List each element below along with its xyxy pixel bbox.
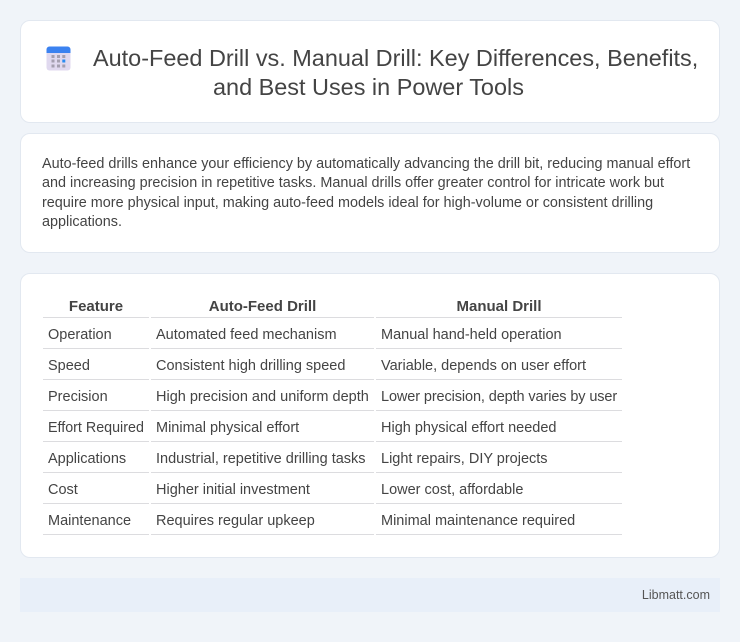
row: speed: Consistent high drilling speed <box>156 358 345 374</box>
title: Auto-Feed Drill vs. Manual Drill: Key Differences, Benefits, <box>93 45 698 71</box>
row: maintenance: Minimal maintenance required <box>381 513 575 529</box>
row: applications: Light repairs, DIY projects <box>381 451 548 467</box>
row: applications <box>48 451 548 467</box>
row: maintenance: Requires regular upkeep <box>156 513 315 529</box>
table header: Auto-Feed Drill <box>209 298 316 315</box>
row: maintenance: Maintenance <box>48 513 131 529</box>
title: and Best Uses in Power Tools <box>213 74 524 100</box>
row: precision: Lower precision, depth varies by user <box>381 389 617 405</box>
row: cost: Higher initial investment <box>156 482 310 498</box>
table header <box>69 298 542 315</box>
row: precision: Precision <box>48 389 108 405</box>
row: cost: Lower cost, affordable <box>381 482 523 498</box>
row: speed: Variable, depends on user effort <box>381 358 586 374</box>
row: operation: Automated feed mechanism <box>156 327 337 343</box>
row: cost <box>48 482 523 498</box>
text block: introduction: Auto-feed drills enhance your efficiency by automatically advancing the drill bit, reducing manual effort <box>42 156 690 172</box>
row: speed <box>48 358 586 374</box>
row: operation <box>48 327 562 343</box>
panel: introduction <box>20 133 720 253</box>
icon: calendar grid <box>46 46 70 70</box>
title <box>93 45 698 100</box>
row: cost: Cost <box>48 482 78 498</box>
text block: introduction: and increasing precision in repetitive tasks. Manual drills offer greater control for intricate work but <box>42 175 664 191</box>
row: effort required: Minimal physical effort <box>156 420 299 436</box>
footer text: Libmatt.com <box>642 588 710 602</box>
row: effort required: High physical effort needed <box>381 420 556 436</box>
row: applications: Industrial, repetitive drilling tasks <box>156 451 366 467</box>
row: precision <box>48 389 617 405</box>
row: effort required: Effort Required <box>48 420 144 436</box>
row: maintenance <box>48 513 575 529</box>
row: effort required <box>48 420 556 436</box>
row: operation: Operation <box>48 327 112 343</box>
footer bar <box>20 578 720 612</box>
panel: comparison table <box>20 273 720 558</box>
row: speed: Speed <box>48 358 90 374</box>
panel: header <box>20 20 720 123</box>
row: applications: Applications <box>48 451 126 467</box>
text block: introduction: require more physical input, making auto-feed models ideal for high-volume or consistent drilling <box>42 195 653 211</box>
text block: introduction: applications. <box>42 214 122 230</box>
row: operation: Manual hand-held operation <box>381 327 562 343</box>
text block: introduction <box>42 156 690 230</box>
table header: Feature <box>69 298 123 315</box>
table header: Manual Drill <box>456 298 542 315</box>
row: precision: High precision and uniform depth <box>156 389 369 405</box>
